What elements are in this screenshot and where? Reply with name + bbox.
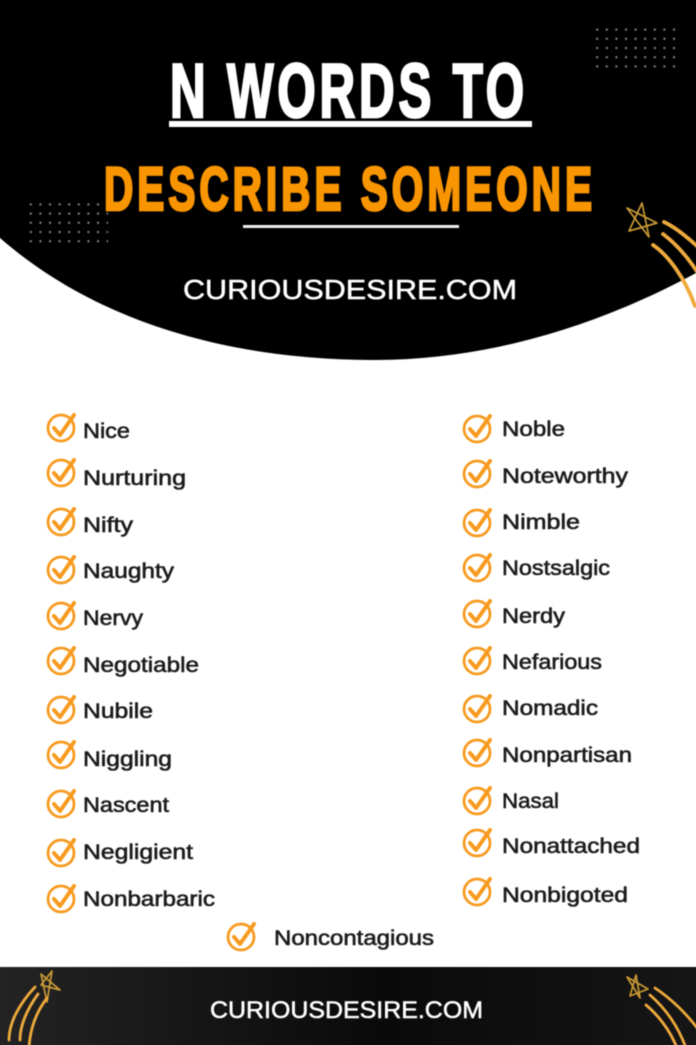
item: Nefarious: Nefarious [502,651,602,674]
item: Nifty: Nifty [83,514,134,537]
item: Naughty: Naughty [83,560,175,583]
website label: CURIOUSDESIRE.COM [183,274,517,305]
item: Nomadic: Nomadic [502,697,598,720]
item: Nurturing: Nurturing [83,467,186,490]
dot pattern left [24,202,108,248]
word list: right column [464,416,640,907]
item: Nervy [48,603,144,630]
footer panel [0,967,696,1045]
item: Nostsalgic: Nostsalgic [502,557,610,580]
item: Nubile: Nubile [83,700,153,723]
item: Noble [464,416,565,442]
item: Niggling [48,742,172,771]
item: Nonbarbaric: Nonbarbaric [83,888,215,911]
icon: shooting star footer left [9,971,60,1045]
item: Nimble: Nimble [502,511,580,534]
dot pattern top right [590,24,680,72]
item: Nasal: Nasal [502,790,559,813]
item: Negotiable: Negotiable [83,654,199,677]
item: Niggling: Niggling [83,748,172,771]
item: Nice [48,415,130,443]
item: Noble: Noble [502,418,565,441]
item: Nervy: Nervy [83,607,144,630]
item: Nascent [48,791,169,817]
item: Nonbarbaric [48,886,215,912]
item: Nice: Nice [83,420,130,443]
word list: left column [48,415,215,912]
item: Naughty [48,557,175,583]
item: Nascent: Nascent [83,794,169,817]
item: Nonpartisan [464,740,632,767]
item: Nonbigoted [464,879,628,907]
header panel: black curved background [0,0,696,360]
item: Negligient: Negligient [83,841,193,864]
item: Nonattached: Nonattached [502,835,640,858]
item: Nasal [464,788,559,814]
item: Noncontagious [228,924,434,950]
footer website label: CURIOUSDESIRE.COM [210,997,483,1024]
item: Nerdy: Nerdy [502,605,566,628]
item: Nefarious [464,648,602,674]
item: Nubile [48,697,153,723]
item: Nurturing [48,460,186,490]
item: Negligient [48,840,193,866]
item: Noteworthy: Noteworthy [502,465,629,488]
title underline [169,121,532,127]
item: Noteworthy [464,461,629,488]
item: Nonattached [464,830,640,858]
item: Nomadic [464,696,598,722]
item: Negotiable [48,648,199,677]
item: Nonbigoted: Nonbigoted [502,884,628,907]
short divider line [243,225,459,228]
item: Nostsalgic [464,555,610,581]
icon: shooting star top right [627,203,696,306]
item: Nifty [48,509,134,537]
item: Noncontagious: Noncontagious [274,927,434,950]
item: Nerdy [464,601,566,628]
item: Nonpartisan: Nonpartisan [502,744,632,767]
item: Nimble [464,510,580,536]
icon: shooting star footer right [627,975,696,1045]
